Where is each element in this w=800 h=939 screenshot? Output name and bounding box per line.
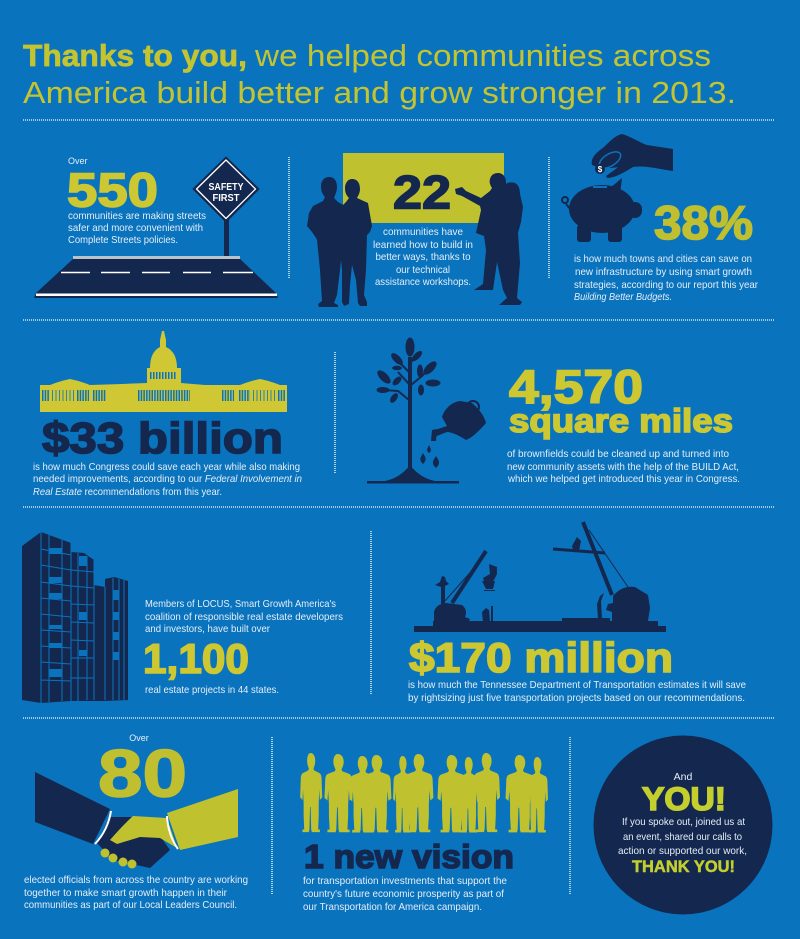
Tennessee description: is how much the Tennessee Department of Transportation estimates it will save [408,679,746,691]
LOCUS description: and investors, have built over [145,623,270,635]
brownfields description: of brownfields could be cleaned up and turned into [507,448,729,460]
panel: 4,570 square miles [367,338,740,485]
panel: 38 percent [562,134,758,303]
panel: 550 communities [34,156,278,298]
550 description: communities are making streets [68,210,206,222]
icon: safety first sign: FIRST [212,193,240,204]
panel: thank you circle [594,736,772,914]
38 percent description [574,253,758,303]
thank you description: action or supported our work, [618,845,747,857]
550 description: safer and more convenient with [68,222,203,234]
lime rectangle [343,153,504,223]
38 percent description: strategies, according to our report this year [574,279,758,291]
square miles label: square miles [509,402,733,439]
projects description: real estate projects in 44 states. [145,684,279,696]
vision description: for transportation investments that support the [303,875,507,887]
brownfields description: which we helped get introduced this year in Congress. [507,473,740,485]
33 billion description: needed improvements, according to our Federal Involvement in [33,473,302,485]
over label: Over [68,156,88,166]
icon: safety first sign [193,157,259,256]
panel: 33 billion [33,331,302,498]
icon: capitol building [40,331,287,412]
550 description [68,210,206,246]
550 description: Complete Streets policies. [68,234,178,246]
navy circle [594,736,772,914]
vision description: country's future economic prosperity as part of [303,888,504,900]
LOCUS description: coalition of responsible real estate developers [145,611,343,623]
22 number: 22 [393,166,451,218]
1,100 number: 1,100 [143,635,249,682]
icon: tree and watering can [367,338,486,484]
title: Thanks to you, [23,38,247,73]
officials description: communities as part of our Local Leaders Council. [24,899,237,911]
title: America build better and grow stronger in 2013. [23,75,736,110]
22 description: learned how to build in [373,239,473,251]
22 description [373,226,473,288]
panel: 1 new vision [300,753,548,913]
icon: handshake [35,772,238,868]
brownfields description: new community assets with the help of the BUILD Act, [507,461,739,473]
thank you description [618,816,747,857]
170 million number: $170 million [409,634,673,681]
Tennessee description [408,679,746,704]
1 new vision heading: 1 new vision [304,838,514,875]
22 description: better ways, thanks to [376,251,471,263]
icon: two men silhouette [307,177,372,307]
38 percent number: 38% [654,196,753,249]
and label: And [674,771,692,783]
icon: road [34,256,278,298]
panel: 1,100 projects [22,532,343,703]
38 percent description: new infrastructure by using smart growth [575,266,752,278]
38 percent description: Building Better Budgets. [574,291,672,303]
icon: presenter and woman silhouette [455,173,523,305]
officials description [24,874,248,911]
LOCUS description: Members of LOCUS, Smart Growth America's [145,598,336,610]
Tennessee description: by rightsizing just five transportation projects based on our recommendations. [408,692,745,704]
4,570 number: 4,570 [509,360,643,413]
80 number: 80 [98,736,187,812]
thank you closing: THANK YOU! [632,857,735,876]
panel: 170 million [408,522,746,704]
LOCUS description [145,598,343,635]
panel: 80 officials [24,733,248,911]
thank you description: an event, shared our calls to [623,831,742,843]
33 billion description: Real Estate recommendations from this year. [33,486,222,498]
you heading: YOU! [642,781,726,817]
over label: Over [129,733,149,743]
22 description: communities have [383,226,463,238]
33 billion number: $33 billion [42,414,283,463]
title [23,38,736,110]
22 description: our technical [396,264,450,276]
33 billion description: is how much Congress could save each year while also making [33,461,300,473]
vision description: our Transportation for America campaign. [303,901,482,913]
icon: cranes and workers [414,522,666,632]
icon: crowd of silhouettes [300,753,548,833]
33 billion description [33,461,302,498]
officials description: elected officials from across the country are working [24,874,248,886]
icon: safety first sign: SAFETY [208,182,244,193]
38 percent description: is how much towns and cities can save on [574,253,752,265]
title: we helped communities across [254,38,711,73]
icon: piggy bank and hand: $ [598,165,603,174]
thank you description: If you spoke out, joined us at [622,816,745,828]
550 number: 550 [67,164,158,218]
brownfields description [507,448,740,485]
icon: piggy bank and hand [562,134,673,242]
panel: 22 communities [307,153,523,307]
22 description: assistance workshops. [375,276,471,288]
officials description: together to make smart growth happen in their [24,887,227,899]
vision description [303,875,507,913]
icon: office towers [22,532,128,703]
